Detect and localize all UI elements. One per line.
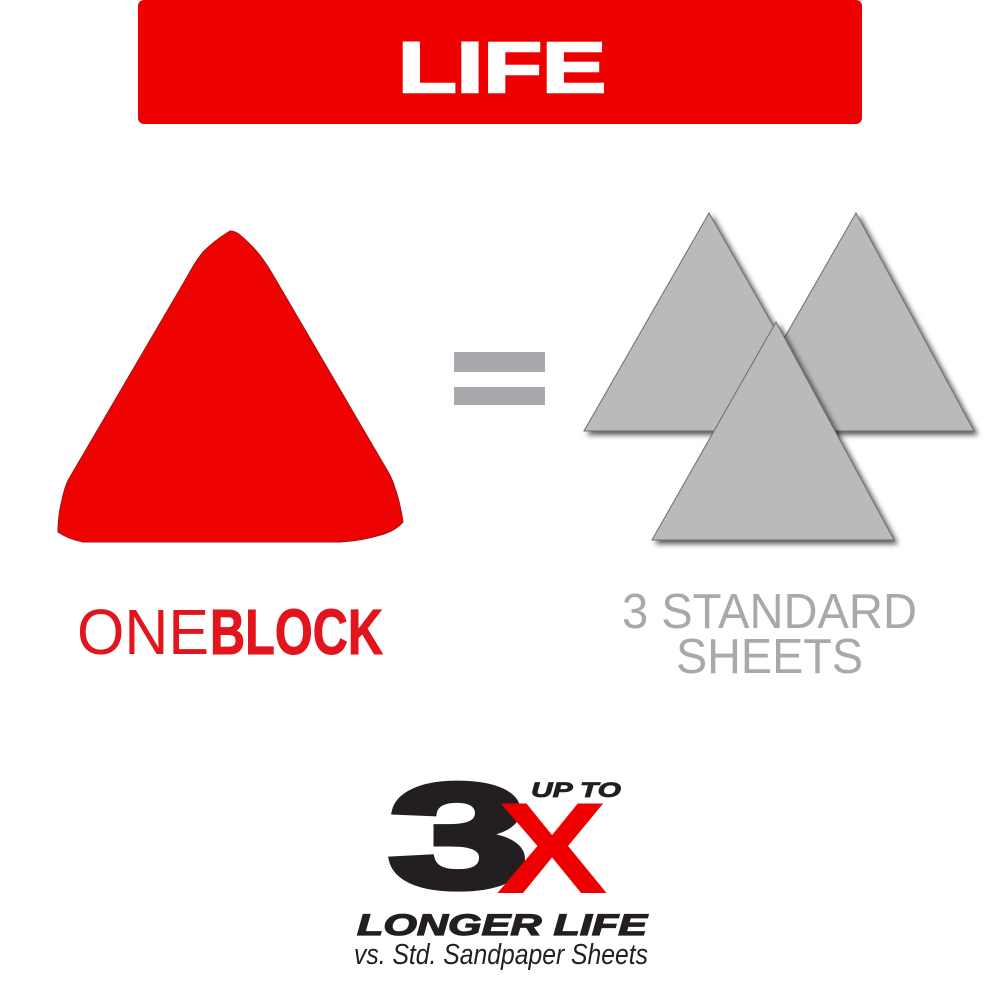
label: 3 standard sheets: 3 STANDARD xyxy=(622,585,917,639)
label: one block xyxy=(77,596,383,668)
logo: up to: UP TO xyxy=(531,779,621,802)
logo: up to 3x longer life xyxy=(354,754,648,971)
label: one block: BLOCK xyxy=(210,596,383,668)
label: 3 standard sheets xyxy=(622,585,917,684)
label: one block: ONE xyxy=(77,596,209,668)
logo multiplier X: X xyxy=(496,775,608,921)
logo: versus standard sandpaper sheets: vs. Std. Sandpaper Sheets xyxy=(354,939,648,971)
logo: longer life: LONGER LIFE xyxy=(357,909,648,942)
icon: three standard sheets xyxy=(584,213,974,540)
title: LIFE: LIFE xyxy=(398,29,606,108)
icon: red one block sanding triangle xyxy=(58,231,403,542)
icon: equals sign xyxy=(454,352,545,405)
logo numeral 3: 3 xyxy=(388,754,529,919)
title banner xyxy=(138,0,862,124)
label: 3 standard sheets: SHEETS xyxy=(676,630,863,684)
